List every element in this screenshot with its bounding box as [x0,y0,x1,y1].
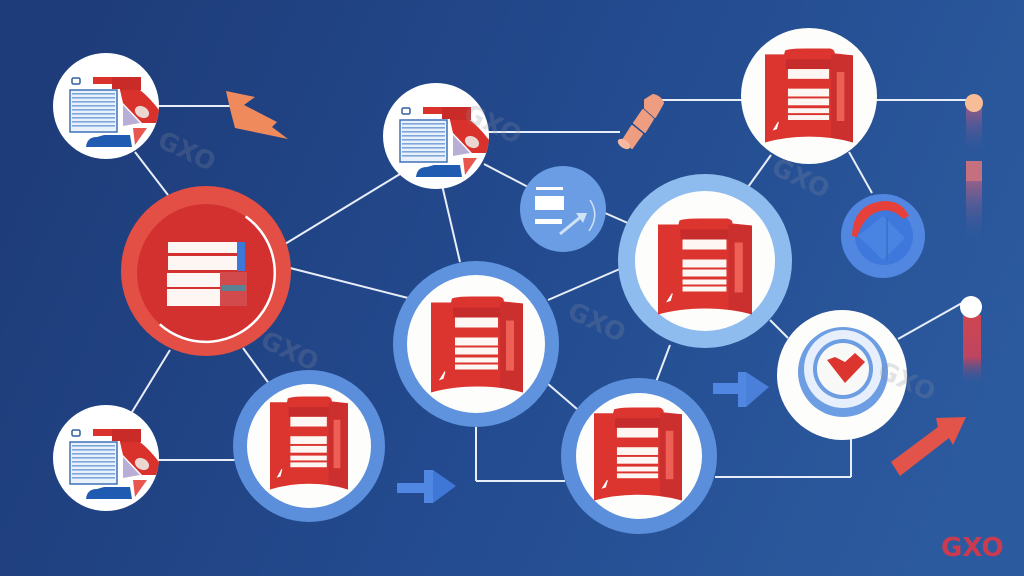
node: computer top left [53,53,159,159]
watermarks: GXO [767,152,834,204]
node: document right large [618,174,792,348]
watermarks [153,98,940,407]
indicator: peach dot with fading bar [965,94,983,243]
watermarks: GXO [563,296,630,348]
node: computer top center [383,83,489,189]
watermarks: GXO [459,98,526,150]
node: check target [777,310,907,440]
node: document top right [741,28,877,164]
logo text: GXO [941,533,1004,563]
node: document bottom left [233,370,385,522]
node: light blue list [520,166,606,252]
connector lines [132,100,970,481]
arrow: orange flag [226,91,288,139]
arrow: blue middle right [713,372,769,407]
watermarks: GXO [153,125,220,177]
node: document bottom center [561,378,717,534]
icon: peach segmented capsule [616,95,663,151]
indicator: white dot with fading bar [960,296,982,385]
node: central red table [121,186,291,356]
node: computer bottom left [53,405,159,511]
arrow: red diagonal [891,417,966,476]
watermarks: GXO [256,325,323,377]
watermarks: GXO [873,355,940,407]
node: blue gauge [841,194,925,278]
arrow: blue bottom center [397,470,456,503]
node: document center [393,261,559,427]
